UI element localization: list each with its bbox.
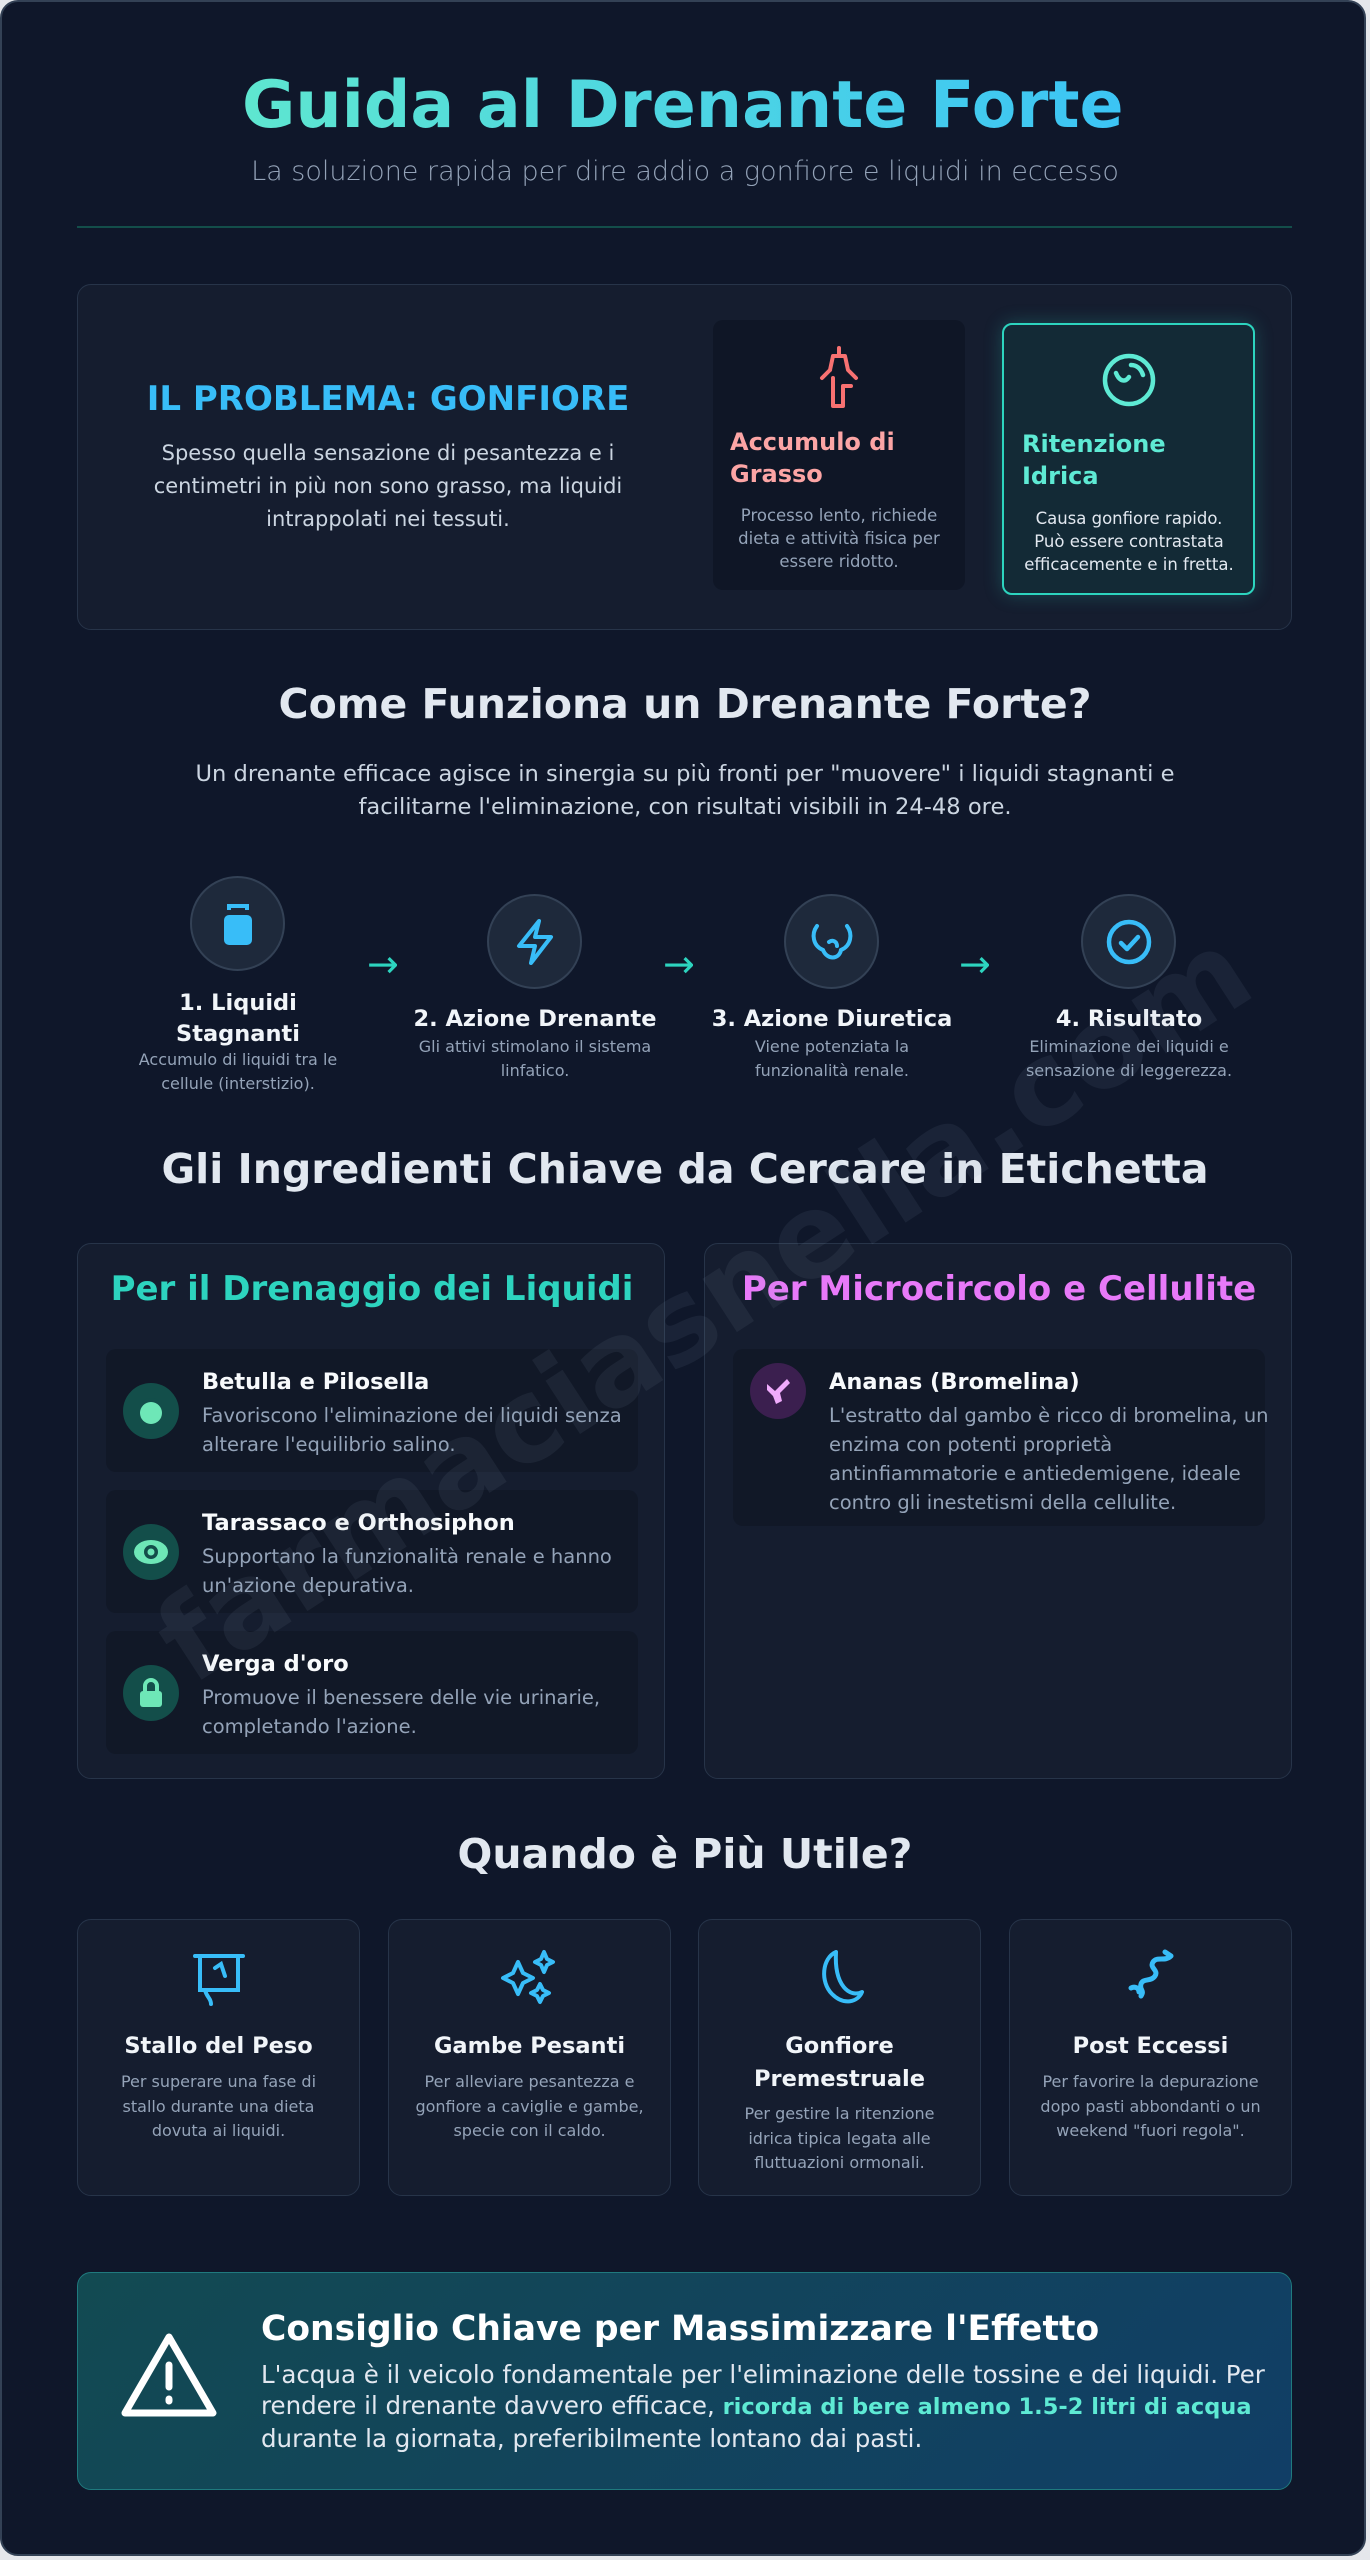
- card: gambe: Per alleviare pesantezza e gonfiore a caviglie e gambe, specie con il caldo.: [415, 2072, 644, 2140]
- problem text: Spesso quella sensazione di pesantezza e i centimetri in più non sono grasso, ma liquidi intrappolati nei tessuti.: [154, 441, 622, 531]
- icon: water: [1102, 354, 1156, 406]
- callout text: durante la giornata, preferibilmente lontano dai pasti.: [261, 2424, 922, 2453]
- card: post eccessi: Per favorire la depurazione dopo pasti abbondanti o un weekend "fuori regola".: [1040, 2072, 1261, 2140]
- step 4: 4. Risultato: [1056, 1006, 1202, 1032]
- callout heading: Consiglio Chiave per Massimizzare l'Effetto: [261, 2309, 1099, 2349]
- item: ananas: L'estratto dal gambo è ricco di bromelina, un enzima con potenti proprietà antinfiammatorie e antiedemigene, ideale contro gli inestetismi della cellulite.: [829, 1404, 1269, 1514]
- icon: fat: [820, 346, 858, 408]
- card: premestruale: [698, 1919, 981, 2196]
- problem heading: IL PROBLEMA: GONFIORE: [147, 379, 629, 419]
- watermark: farmaciasnella.com: [133, 903, 1274, 1710]
- step 2: [413, 894, 657, 1080]
- item: tarassaco: Tarassaco e Orthosiphon: [202, 1510, 515, 1536]
- item: betulla: Betulla e Pilosella: [202, 1369, 429, 1395]
- subtitle: La soluzione rapida per dire addio a gonfiore e liquidi in eccesso: [251, 156, 1119, 187]
- title: Accumulo di Grasso: [730, 428, 895, 488]
- item: verga d'oro: Promuove il benessere delle vie urinarie, completando l'azione.: [202, 1686, 600, 1738]
- card: ritenzione idrica: [1002, 323, 1255, 595]
- panel: microcircolo: [704, 1243, 1292, 1779]
- item: verga d'oro: Verga d'oro: [202, 1651, 349, 1677]
- desc: Processo lento, richiede dieta e attività fisica per essere ridotto.: [738, 506, 940, 571]
- card: post eccessi: [1009, 1919, 1292, 2196]
- step 1: 1. Liquidi: [179, 990, 297, 1016]
- callout text: rendere il drenante davvero efficace, ricorda di bere almeno 1.5-2 litri di acqua: [261, 2391, 1252, 2420]
- card: stallo: [77, 1919, 360, 2196]
- panel: drenaggio: [77, 1243, 665, 1779]
- card: premestruale: Per gestire la ritenzione idrica tipica legata alle fluttuazioni ormonali.: [744, 2104, 935, 2172]
- card: stallo: Stallo del Peso: [124, 2033, 313, 2059]
- icon: [190, 876, 285, 971]
- panel: problem: [77, 284, 1292, 630]
- desc: Causa gonfiore rapido. Può essere contrastata efficacemente e in fretta.: [1024, 509, 1234, 574]
- text: intro: Un drenante efficace agisce in sinergia su più fronti per "muovere" i liquidi stagnanti e facilitarne l'eliminazione, con risultati visibili in 24-48 ore.: [195, 761, 1174, 820]
- callout: consiglio: [77, 2272, 1292, 2490]
- card: accumulo di grasso: [713, 320, 965, 590]
- card: gambe: Gambe Pesanti: [434, 2033, 625, 2059]
- step 2: Gli attivi stimolano il sistema linfatico.: [419, 1037, 651, 1080]
- step 4: Eliminazione dei liquidi e sensazione di leggerezza.: [1026, 1037, 1232, 1080]
- item: betulla: [106, 1349, 638, 1472]
- callout text: [261, 2360, 1265, 2453]
- arrow 3: →: [959, 942, 991, 986]
- step 2: 2. Azione Drenante: [413, 1006, 657, 1032]
- panel heading: Per Microcircolo e Cellulite: [742, 1269, 1256, 1309]
- item: ananas: Ananas (Bromelina): [829, 1369, 1080, 1395]
- title: Ritenzione Idrica: [1022, 430, 1166, 490]
- card: stallo: Per superare una fase di stallo durante una dieta dovuta ai liquidi.: [121, 2072, 316, 2140]
- card: gambe: [388, 1919, 671, 2196]
- step 1: Stagnanti: [176, 1021, 300, 1047]
- heading: quando: Quando è Più Utile?: [458, 1830, 912, 1878]
- item: ananas: [733, 1349, 1265, 1526]
- arrow 1: →: [367, 942, 399, 986]
- item: verga d'oro: [106, 1631, 638, 1754]
- step 3: [712, 894, 952, 1080]
- icon: warning: [122, 2334, 216, 2416]
- item: tarassaco: Supportano la funzionalità renale e hanno un'azione depurativa.: [202, 1545, 612, 1597]
- step 1: Accumulo di liquidi tra le cellule (interstizio).: [139, 1050, 337, 1093]
- callout text: L'acqua è il veicolo fondamentale per l'eliminazione delle tossine e dei liquidi. Per: [261, 2360, 1265, 2389]
- heading: come funziona: Come Funziona un Drenante Forte?: [278, 680, 1091, 728]
- card: premestruale: Premestruale: [754, 2066, 925, 2092]
- step 3: Viene potenziata la funzionalità renale.: [755, 1037, 909, 1080]
- step 1: [138, 876, 337, 1093]
- step 3: 3. Azione Diuretica: [712, 1006, 952, 1032]
- panel heading: Per il Drenaggio dei Liquidi: [111, 1269, 633, 1309]
- arrow 2: →: [663, 942, 695, 986]
- card: premestruale: Gonfiore: [785, 2033, 894, 2059]
- item: betulla: Favoriscono l'eliminazione dei liquidi senza alterare l'equilibrio salino.: [202, 1404, 622, 1456]
- step 4: [1026, 894, 1232, 1080]
- heading: ingredienti: Gli Ingredienti Chiave da Cercare in Etichetta: [161, 1145, 1208, 1193]
- item: tarassaco: [106, 1490, 638, 1613]
- title: Guida al Drenante Forte: [242, 68, 1124, 143]
- card: post eccessi: Post Eccessi: [1073, 2033, 1228, 2059]
